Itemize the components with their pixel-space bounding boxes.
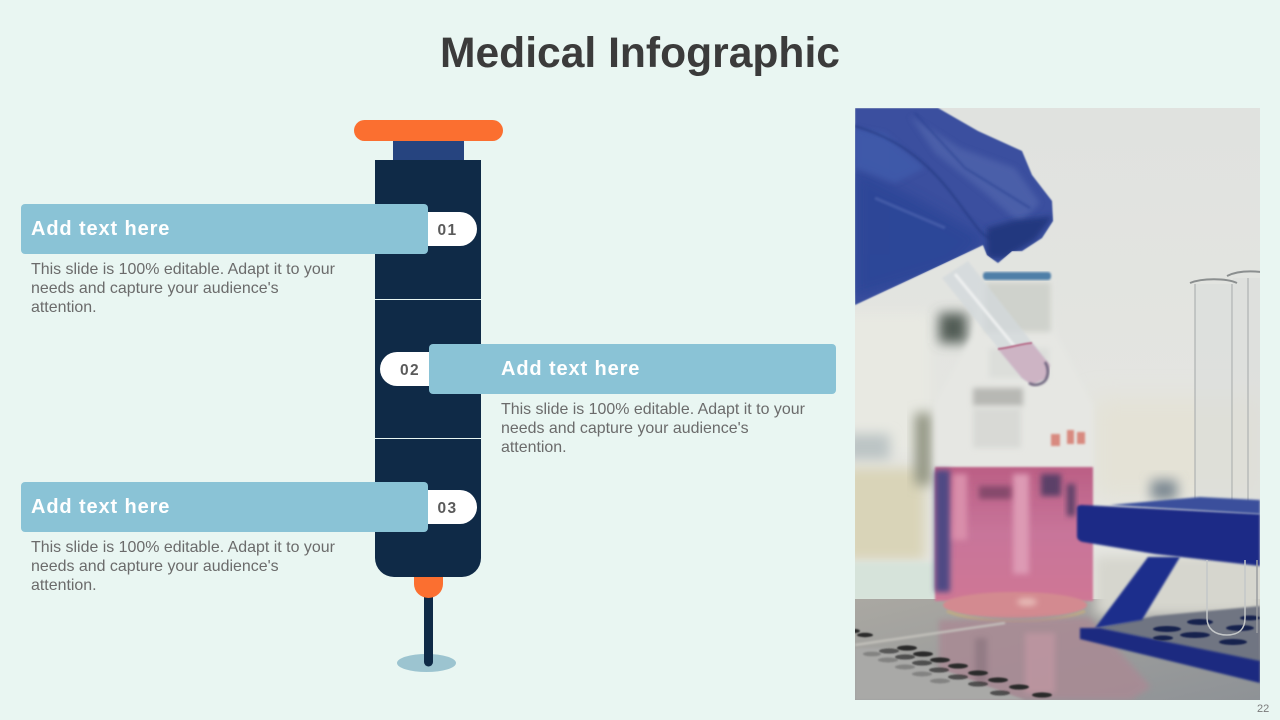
flask blue cap — [983, 272, 1051, 280]
pink reflection — [939, 617, 1151, 700]
step 03 description: needs and capture your audience's — [31, 558, 279, 575]
title: Medical Infographic — [440, 29, 840, 77]
needle — [424, 590, 433, 666]
rack leg — [1095, 557, 1180, 628]
flask glass body — [935, 280, 1093, 475]
gloved hand — [855, 108, 1053, 305]
rack top — [1077, 505, 1260, 566]
step 01 description: attention. — [31, 299, 97, 316]
rack base surface — [1097, 606, 1260, 663]
flask pink liquid — [935, 467, 1093, 601]
step 02 label bar — [429, 344, 836, 394]
flask base — [943, 592, 1087, 618]
glove shape — [855, 108, 1053, 305]
back test tubes — [1190, 271, 1261, 504]
front test tubes below rack — [1207, 560, 1257, 635]
step 03 description: attention. — [31, 577, 97, 594]
needle hub — [414, 576, 443, 598]
flask — [935, 272, 1093, 622]
blue test tube rack — [1077, 497, 1260, 683]
step 02 label bar: Add text here — [501, 358, 640, 380]
blurred background left — [835, 313, 1263, 602]
step 03 label bar: Add text here — [31, 496, 170, 518]
step 01 description: This slide is 100% editable. Adapt it to your — [31, 261, 335, 278]
step 02 description: This slide is 100% editable. Adapt it to your — [501, 401, 805, 418]
step 03 description — [31, 539, 335, 594]
rack base holes — [1153, 616, 1260, 645]
tube pink sample — [998, 343, 1050, 385]
step 03 number pill: 03 — [437, 500, 458, 517]
step 02 description: attention. — [501, 439, 567, 456]
syringe barrel — [375, 160, 481, 577]
table surface — [855, 599, 1260, 700]
flask red graduation marks — [1051, 430, 1085, 446]
step 01 description — [31, 261, 335, 316]
step 01 label bar — [21, 204, 428, 254]
page number: 22 — [1257, 703, 1269, 715]
step 03 number pill — [417, 490, 477, 524]
step 01 number pill: 01 — [437, 222, 458, 239]
step 01 number pill — [417, 212, 477, 246]
glove folds — [855, 113, 1053, 298]
step 02 description — [501, 401, 805, 456]
step 01 label bar: Add text here — [31, 218, 170, 240]
vent holes — [850, 629, 1052, 698]
test tube in hand — [942, 261, 1050, 385]
step 03 description: This slide is 100% editable. Adapt it to your — [31, 539, 335, 556]
tube glass — [942, 261, 1050, 385]
photo: gloved hand holding test tube over flask of pink liquid — [855, 108, 1260, 700]
step 02 number pill: 02 — [400, 362, 420, 379]
step 03 label bar — [21, 482, 428, 532]
photo background wall — [855, 108, 1260, 700]
step 02 description: needs and capture your audience's — [501, 420, 749, 437]
plunger head — [354, 120, 503, 141]
rack base front — [1080, 628, 1260, 683]
plunger stem — [393, 140, 464, 161]
table reflection and vent holes — [850, 617, 1151, 700]
step 02 number pill — [380, 352, 440, 386]
syringe illustration — [354, 120, 503, 672]
needle shadow ellipse — [397, 654, 456, 672]
step 01 description: needs and capture your audience's — [31, 280, 279, 297]
